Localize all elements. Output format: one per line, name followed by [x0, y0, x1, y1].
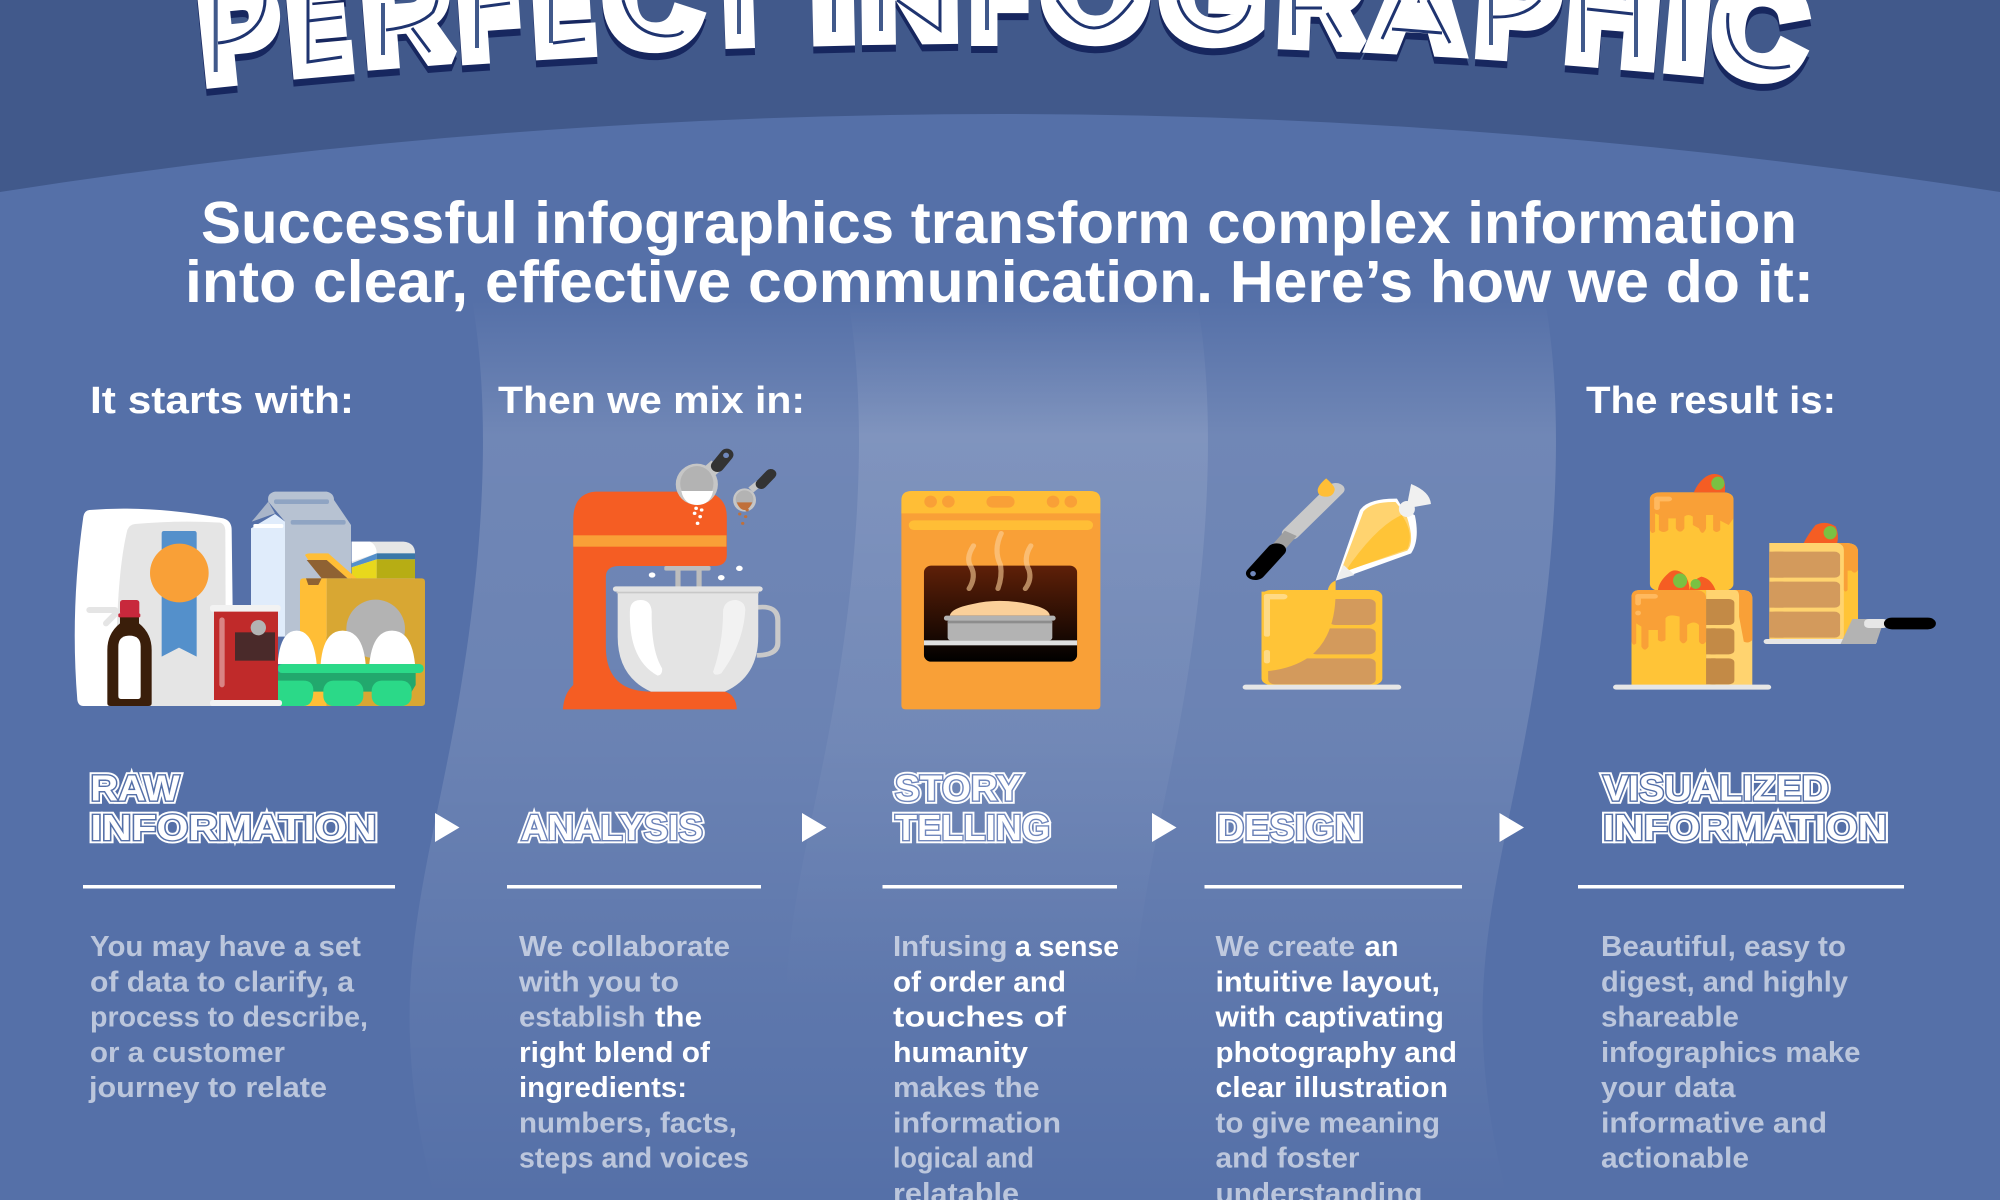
strawberries: middle	[1658, 570, 1715, 590]
title: Perfect Infographic (arched, clipped by top edge)	[193, 0, 1812, 116]
intro headline	[185, 190, 1814, 315]
milk carton	[251, 492, 351, 637]
body text: raw information: or a customer	[90, 1037, 285, 1069]
step heading: raw information: RAW	[90, 768, 180, 808]
step heading: story telling: STORY	[895, 768, 1021, 808]
step heading: story telling: TELLING	[895, 807, 1050, 848]
body text: story telling: touches of	[893, 1002, 1066, 1034]
title white letter layer	[193, 0, 1812, 109]
mixer band	[573, 535, 726, 547]
small measuring spoon	[733, 474, 771, 525]
title shadow layer	[193, 0, 1812, 116]
step heading: story telling: TELLING	[895, 807, 1050, 848]
body text: story telling: makes the	[893, 1072, 1040, 1104]
bowl handle	[757, 607, 778, 655]
body text: story telling: logical and	[893, 1142, 1034, 1174]
step heading: design: DESIGN	[1217, 807, 1362, 848]
oven body	[901, 510, 1100, 709]
body text: analysis: establish	[519, 1002, 646, 1034]
subhead: it starts with: It starts with:	[90, 380, 354, 422]
beater	[664, 566, 711, 587]
cake server	[1764, 618, 1936, 644]
body text: story telling	[893, 931, 1119, 1200]
step heading: visualized information: VISUALIZED	[1603, 768, 1829, 808]
body text: visualized information: informative and	[1601, 1107, 1827, 1139]
top tier	[1650, 492, 1733, 591]
body text: visualized information: Beautiful, easy to	[1601, 931, 1846, 963]
vanilla bottle	[107, 600, 152, 706]
piping bag	[1336, 484, 1431, 581]
bottom tier	[1631, 590, 1752, 685]
body text: story telling: information	[893, 1107, 1061, 1139]
step heading: visualized information	[1603, 768, 1887, 848]
body text: design: to give meaning	[1216, 1107, 1440, 1139]
subhead: the result is: The result is:	[1586, 380, 1836, 422]
body text: visualized information	[1601, 931, 1860, 1174]
arrow 1	[435, 813, 460, 842]
body text: raw information: of data to clarify, a	[90, 966, 355, 998]
icon: stand mixer	[563, 453, 778, 709]
body text: raw information: journey to relate	[88, 1072, 327, 1104]
egg carton	[278, 664, 424, 706]
step heading: raw information	[90, 768, 376, 848]
body text: design: clear illustration	[1216, 1072, 1448, 1104]
body text: analysis: numbers, facts,	[519, 1107, 737, 1139]
body text: raw information	[88, 931, 368, 1104]
body text: analysis	[518, 931, 749, 1174]
mixing bowl	[613, 586, 763, 692]
divider rules under headings	[83, 885, 1904, 888]
strawberry: top	[1694, 474, 1725, 492]
oven window	[924, 566, 1077, 662]
arrow 2	[802, 813, 826, 842]
butter box	[352, 542, 415, 578]
cereal box	[300, 553, 425, 706]
body text: visualized information: digest, and highly	[1601, 966, 1848, 998]
step heading: visualized information: VISUALIZED	[1603, 768, 1829, 808]
oven handle	[909, 520, 1093, 530]
body text: analysis: steps and voices	[519, 1142, 749, 1174]
baking pan with dough	[944, 601, 1056, 640]
step heading: raw information: INFORMATION	[90, 807, 376, 848]
arrow 3	[1152, 813, 1176, 842]
step heading: design: DESIGN	[1217, 807, 1362, 848]
body text: analysis: with you to	[518, 966, 679, 998]
icon: finished cake and slice	[1613, 474, 1936, 690]
body text: visualized information: your data	[1601, 1072, 1736, 1104]
body text: design: with captivating	[1214, 1002, 1444, 1034]
step heading: raw information: INFORMATION	[90, 807, 376, 848]
step heading: visualized information: INFORMATION	[1603, 807, 1887, 848]
flour bag	[75, 509, 233, 706]
body text: story telling: of order and	[893, 966, 1066, 998]
step heading: raw information: INFORMATION	[90, 807, 376, 848]
plate	[1613, 685, 1771, 690]
flying dots	[649, 566, 743, 580]
body text: analysis: the	[655, 1002, 702, 1034]
body text: story telling: Infusing	[893, 931, 1008, 963]
step heading: visualized information: INFORMATION	[1603, 807, 1887, 848]
body text: design: We create	[1216, 931, 1355, 963]
body text: analysis: right blend of	[519, 1037, 710, 1069]
step heading: story telling	[895, 768, 1050, 848]
body text: analysis: We collaborate	[519, 931, 730, 963]
icon: raw ingredients (flour, milk, eggs, can, bottle)	[75, 492, 425, 706]
body text: story telling: humanity	[893, 1037, 1028, 1069]
body text: design: an	[1364, 931, 1398, 963]
body text: visualized information: infographics make	[1601, 1037, 1860, 1069]
background: wide wavy light band	[410, 300, 1556, 1200]
step heading: analysis: ANALYSIS	[521, 807, 703, 848]
body text: visualized information: shareable	[1601, 1002, 1739, 1034]
subhead: then we mix in: Then we mix in:	[498, 380, 805, 422]
large measuring cup	[676, 453, 729, 525]
red can	[210, 605, 282, 706]
step heading: analysis: ANALYSIS	[521, 807, 703, 848]
step heading: analysis: ANALYSIS	[521, 807, 703, 848]
body text: design: photography and	[1216, 1037, 1457, 1069]
step heading: visualized information: VISUALIZED	[1603, 768, 1829, 808]
step heading: story telling: STORY	[895, 768, 1021, 808]
icon: cake being iced	[1243, 478, 1431, 690]
oven control panel	[901, 491, 1100, 513]
mixer body	[563, 492, 737, 709]
spatula	[1250, 478, 1336, 576]
title inline details	[216, 0, 1790, 72]
steam	[969, 533, 1031, 589]
step heading: story telling: STORY	[895, 768, 1021, 808]
intro headline: into clear, effective communication. Here’s how we do it:	[185, 249, 1814, 315]
knobs	[924, 496, 1077, 508]
eggs	[278, 631, 415, 664]
step heading: raw information: RAW	[90, 768, 180, 808]
arrow 4	[1500, 813, 1524, 842]
body text: raw information: process to describe,	[90, 1002, 368, 1034]
body text: design	[1214, 931, 1457, 1200]
body text: raw information: You may have a set	[90, 931, 361, 963]
icon: oven	[901, 491, 1100, 709]
step heading: visualized information: INFORMATION	[1603, 807, 1887, 848]
cake with layers	[1262, 581, 1382, 685]
body text: analysis: ingredients:	[519, 1072, 687, 1104]
body text: story telling: a sense	[1015, 931, 1119, 963]
rack	[924, 640, 1077, 645]
strawberry: slice	[1804, 523, 1838, 543]
body text: design: intuitive layout,	[1216, 966, 1440, 998]
plate	[1243, 685, 1401, 690]
step heading: raw information: RAW	[90, 768, 180, 808]
intro headline: Successful infographics transform complex information	[201, 190, 1797, 256]
body text: visualized information: actionable	[1601, 1142, 1749, 1174]
cake slice	[1769, 543, 1858, 639]
background: central wavy light band	[786, 300, 1208, 1200]
step heading: story telling: TELLING	[895, 807, 1050, 848]
body text: design: and foster	[1216, 1142, 1360, 1174]
step heading: design: DESIGN	[1217, 807, 1362, 848]
